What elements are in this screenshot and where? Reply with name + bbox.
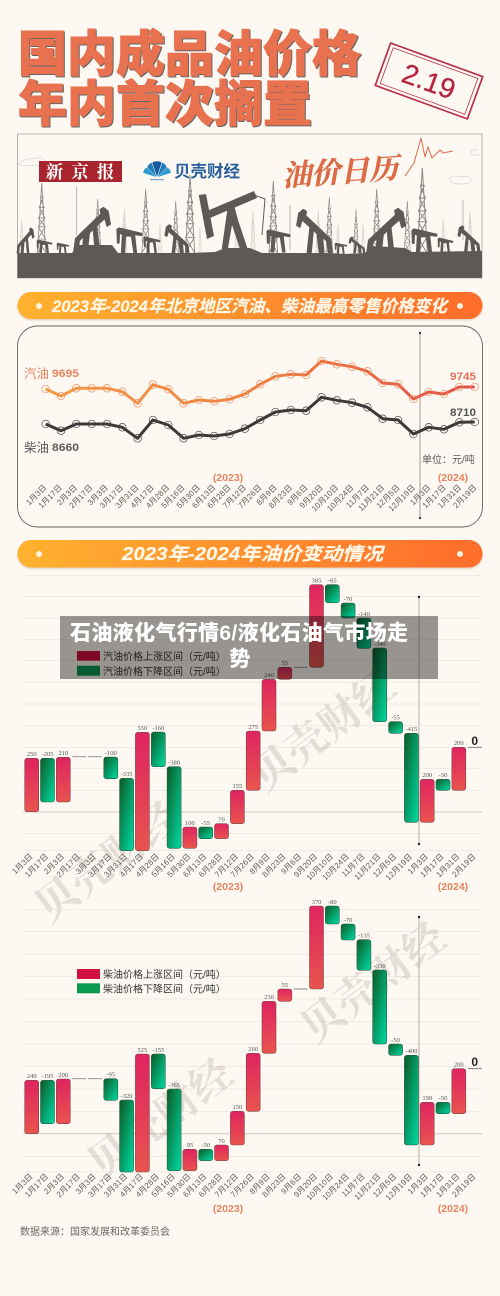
x axis labels: 1月3日 [406,852,430,876]
bar value labels: 155 [233,783,242,790]
x axis labels: 6月13日 [181,1172,208,1199]
heading: 油价日历 [282,138,453,193]
bar value labels: -50 [439,772,447,779]
chart: gasoline waterfall: 贝壳财经 [27,792,191,932]
x axis labels: 1月3日 [10,852,34,876]
x axis labels: 12月5日 [371,852,398,879]
bar value labels: -365 [168,1082,180,1089]
label: gasoline start: 9695 [52,368,79,380]
x axis labels: 3月31日 [113,483,141,510]
bar value labels: 260 [248,1046,258,1053]
x axis labels: 6月13日 [190,483,217,510]
bar value labels: 150 [233,1104,242,1111]
x axis labels: 8月23日 [260,1172,288,1199]
x axis labels: 1月3日 [406,1172,430,1196]
overlay caption banner: 石油液化气行情6/液化石油气市场走 [70,621,408,645]
chart: gasoline waterfall [10,575,482,932]
bar value labels: 250 [27,751,37,758]
chart: diesel waterfall: 贝壳财经 [80,1049,244,1189]
x axis labels: 10月24日 [321,1172,351,1202]
logo: 贝壳财经 [143,161,240,181]
x axis labels: 9月20日 [298,483,325,510]
x axis labels: 11月21日 [353,1172,382,1202]
x axis labels: 10月10日 [310,483,340,513]
x axis labels: 3月3日 [86,483,110,507]
label: year 2024: (2024) [438,881,468,893]
x axis labels: 12月19日 [387,483,417,513]
x axis labels: 1月17日 [37,483,64,510]
bar value labels: -95 [106,1072,115,1078]
x axis labels: 1月3日 [24,483,48,507]
x axis labels: 1月17日 [419,852,446,879]
bar value labels: -50 [391,1037,400,1044]
x axis labels [24,483,478,513]
divider 2023/2024 [419,332,421,519]
x axis labels: 5月30日 [175,483,202,510]
x axis labels: 1月17日 [23,1172,50,1199]
x axis labels: 4月17日 [129,483,156,510]
label: year 2023: (2023) [213,881,243,893]
x axis labels: 8月23日 [267,483,294,510]
x axis labels: 7月12日 [221,483,248,510]
panel: line chart [18,326,482,527]
bar value labels: -400 [405,1048,417,1055]
bar value labels: -135 [358,932,370,940]
overlay caption banner [60,616,438,679]
bar value labels: 200 [454,1062,464,1068]
x axis labels: 5月16日 [150,852,177,879]
title: 国内成品油价格 [18,27,361,82]
bar value labels [27,899,478,1149]
bar value labels: -415 [405,726,417,733]
bar value labels: 525 [138,1047,147,1054]
x axis labels: 3月17日 [98,483,125,510]
x axis labels: 8月9日 [248,852,272,876]
bar value labels: 210 [58,750,68,757]
label: year 2023: (2023) [213,1203,243,1215]
bars [25,585,482,851]
logo: 新京报: 新京报 [46,162,122,182]
x axis labels: 9月20日 [292,852,319,879]
x axis labels: 11月21日 [356,483,386,513]
label: diesel start: 8660 [52,442,79,454]
source note: 数据来源：国家发展和改革委员会 [20,1225,170,1238]
x axis labels: 11月21日 [353,852,382,882]
x axis labels: 10月10日 [305,852,335,882]
x axis labels: 6月13日 [181,852,208,879]
bar value labels: 70 [218,1138,225,1145]
x axis labels: 6月28日 [206,483,233,510]
bar value labels: -140 [358,611,370,618]
x axis labels: 2月17日 [55,1172,82,1199]
x axis labels: 4月17日 [118,852,145,879]
x axis labels: 4月17日 [118,1172,145,1199]
legend: 汽油价格下降区间（元/吨） [103,665,226,678]
x axis labels: 6月28日 [197,1172,224,1199]
bar value labels: 0 [471,1055,478,1069]
bar value labels: 100 [185,820,195,827]
bar value labels: -380 [168,760,180,766]
x axis labels: 9月6日 [286,483,310,507]
section heading: oil price moves: 2023年-2024年油价变动情况 [121,544,385,564]
bar value labels: -50 [201,1142,210,1149]
bar value labels: 200 [454,740,464,747]
x axis labels: 4月28日 [134,852,161,879]
x axis labels: 1月17日 [421,483,448,510]
chart: diesel waterfall [10,899,482,1215]
legend: 汽油价格上涨区间（元/吨） [103,650,226,663]
title [18,27,361,132]
bar value labels: 385 [312,578,321,584]
bar value labels: 370 [312,899,321,906]
divider 2023/2024 [418,916,420,1166]
x axis labels: 6月28日 [197,852,224,879]
x axis labels: 1月17日 [23,852,50,879]
label: unit: 单位：元/吨 [422,453,475,466]
x axis labels: 2月19日 [450,1172,477,1199]
bar value labels: 240 [264,672,274,679]
bar value labels: -70 [344,596,352,603]
bar value labels: -340 [374,641,386,648]
x axis labels: 3月3日 [74,1172,98,1196]
bar value labels: -80 [328,899,337,906]
x axis labels: 5月16日 [150,1172,177,1199]
bar value labels: 200 [58,1072,68,1079]
x axis labels: 7月26日 [236,483,263,510]
heading: 油价日历: 油价日历 [282,152,403,193]
x axis labels: 5月16日 [159,483,187,510]
bar value labels: -155 [152,1047,164,1054]
bar value labels: -320 [121,1093,133,1100]
overlay caption banner: 势 [230,648,250,671]
bar value labels: 240 [27,1073,37,1080]
x axis labels: 2月3日 [42,1172,66,1196]
label: gasoline start: 汽油 [24,366,49,381]
x axis labels: 1月31日 [436,483,463,510]
x axis labels: 8月9日 [248,1172,272,1196]
chart: diesel waterfall: 贝壳财经 [293,913,457,1053]
x axis labels: 3月31日 [102,1172,129,1199]
x axis labels: 4月28日 [144,483,171,510]
x axis labels: 11月7日 [344,483,371,510]
x axis labels: 7月12日 [213,852,240,879]
bar value labels: -70 [344,917,352,924]
x axis labels: 12月5日 [371,1172,398,1199]
x axis labels: 10月10日 [305,1172,335,1202]
date stamp [375,43,483,119]
bar value labels: -100 [105,750,117,757]
bar value labels: -205 [42,751,53,758]
title: 年内首次搁置 [18,78,312,132]
bars [25,906,482,1172]
bar value labels: -335 [121,771,133,778]
x axis labels: 9月20日 [292,1172,319,1199]
bar value labels: -85 [328,578,337,584]
section heading: price change: 2023年-2024年北京地区汽油、柴油最高零售价格变化 [51,297,450,316]
x axis labels: 11月7日 [340,1172,367,1199]
legend: 柴油价格下降区间（元/吨） [103,982,226,996]
legend [77,968,226,996]
bar value labels: -55 [201,820,210,827]
bar value labels: 550 [138,725,147,732]
x axis labels: 3月31日 [102,852,129,879]
x axis labels: 3月17日 [86,852,114,879]
x axis labels: 8月9日 [255,483,279,507]
bar value labels: 55 [282,982,288,989]
line: gasoline [46,361,475,403]
bar value labels: 275 [248,724,258,731]
legend: 柴油价格上涨区间（元/吨） [103,968,226,981]
x axis labels: 2月17日 [67,483,95,510]
x axis labels: 12月19日 [384,1172,414,1202]
line: diesel [46,397,475,438]
label: gasoline end: 9745 [450,371,476,383]
label: year 2024: (2024) [438,1203,468,1215]
x axis labels: 9月6日 [279,1172,303,1196]
x axis labels: 2月3日 [55,483,79,507]
x axis labels [10,1172,477,1202]
section heading: price change [18,292,482,319]
label: year 2024: (2024) [438,472,468,484]
x axis labels: 7月12日 [213,1172,240,1199]
bar value labels: 0 [471,734,478,748]
x axis labels: 1月31日 [434,852,462,879]
x axis labels: 1月17日 [419,1172,446,1199]
x axis labels: 7月26日 [229,1172,256,1199]
label: diesel end: 8710 [450,407,476,419]
logo: 贝壳财经: 贝壳财经 [174,161,240,181]
x axis labels: 10月24日 [321,852,351,882]
x axis labels: 4月28日 [134,1172,161,1199]
bar value labels: -55 [391,714,400,722]
bar value labels: -195 [42,1073,53,1080]
x axis labels: 5月30日 [165,852,193,879]
x axis labels: 12月19日 [384,852,414,882]
bar value labels: -330 [374,963,386,970]
label: gasoline start [24,366,79,381]
x axis labels: 10月24日 [325,483,356,513]
chart: gasoline waterfall: 贝壳财经 [243,661,407,801]
x axis labels: 3月3日 [74,852,98,876]
x axis labels: 2月19日 [451,483,478,510]
x axis labels: 12月5日 [375,483,402,510]
bar value labels: -160 [152,725,164,732]
x axis labels: 1月3日 [408,483,432,507]
x axis labels: 7月26日 [229,852,256,879]
label: diesel start [24,441,79,455]
section heading: oil price moves [18,540,482,568]
bar value labels: -50 [439,1095,447,1102]
x axis labels [10,852,477,882]
x axis labels: 3月17日 [86,1172,114,1199]
x axis labels: 8月23日 [260,852,288,879]
bar value labels: 200 [422,772,432,779]
x axis labels: 11月7日 [340,852,367,879]
bar value labels: 230 [264,994,274,1001]
divider 2023/2024 [418,596,420,845]
label: diesel start: 柴油 [24,441,49,455]
banner: oil field [17,134,482,278]
x axis labels: 5月30日 [165,1172,193,1199]
bar value labels: 95 [187,1142,193,1149]
legend [77,650,226,678]
x axis labels: 9月6日 [279,852,303,876]
x axis labels: 1月31日 [434,1172,462,1199]
bar value labels: 190 [422,1095,432,1102]
bar value labels: 55 [282,660,288,667]
x axis labels: 2月3日 [42,852,66,876]
x axis labels: 2月17日 [55,852,82,879]
date stamp: 2.19 [398,58,460,105]
label: year 2023: (2023) [213,472,243,484]
x axis labels: 1月3日 [10,1172,34,1196]
bar value labels [27,578,478,827]
x axis labels: 2月19日 [450,852,477,879]
bar value labels: 70 [218,816,225,824]
